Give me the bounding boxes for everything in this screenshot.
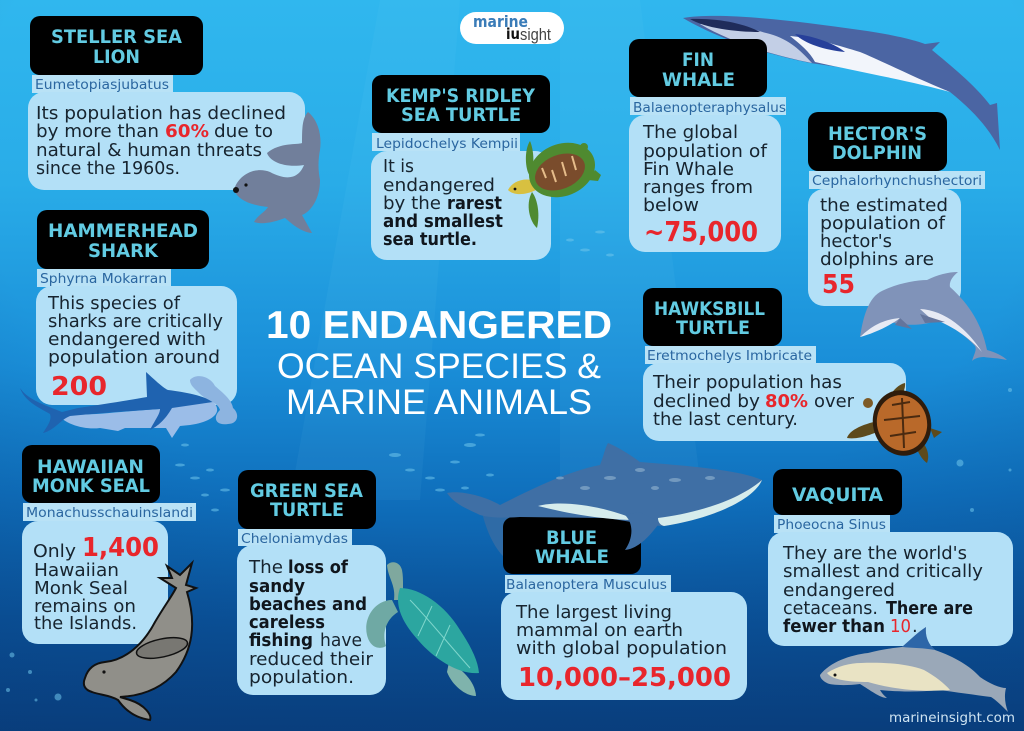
heading: blue whale xyxy=(503,517,641,574)
text block: dolphins are xyxy=(820,249,934,270)
heading: Hawaiian monk seal: MONK SEAL xyxy=(32,476,150,497)
credit: website: marineinsight.com xyxy=(889,711,1015,726)
text block: hector's xyxy=(820,231,892,252)
text block: Hawaiian xyxy=(34,560,119,581)
text block: the last century. xyxy=(653,409,798,430)
heading: hawksbill turtle: TURTLE xyxy=(676,318,750,339)
icon: hammerhead shark xyxy=(20,372,237,438)
text block: over xyxy=(814,391,855,412)
text block: 10,000–25,000 xyxy=(518,663,731,693)
heading: hawksbill turtle xyxy=(643,288,782,346)
text block: This species of xyxy=(47,293,181,314)
text block: with global population xyxy=(516,638,727,659)
scientific name: Cephalorhynchushectori xyxy=(812,174,982,189)
text block: endangered xyxy=(783,580,895,601)
heading: fin whale: FIN xyxy=(682,50,714,71)
text block: fishing xyxy=(249,630,313,651)
text block: since the 1960s. xyxy=(36,158,180,179)
scientific name: Balaenopteraphysalus xyxy=(633,101,786,116)
scientific name: Eumetopiasjubatus xyxy=(35,78,169,93)
text block: and smallest xyxy=(383,211,503,232)
text block: smallest and critically xyxy=(783,561,983,582)
icon: blue whale tail (behind label) xyxy=(482,506,530,562)
text block xyxy=(237,545,386,695)
text block: declined by xyxy=(653,391,760,412)
scientific name: Sphyrna Mokarran xyxy=(40,272,167,287)
text block: reduced their xyxy=(249,649,374,670)
heading: Hector's dolphin: DOLPHIN xyxy=(832,143,922,164)
heading: hammerhead shark: SHARK xyxy=(88,241,159,262)
text block xyxy=(768,532,1013,646)
text block: population around xyxy=(48,347,220,368)
text block: careless xyxy=(249,612,325,633)
text block xyxy=(22,521,168,644)
heading: hammerhead shark: HAMMERHEAD xyxy=(48,221,198,242)
icon: sea lion xyxy=(233,112,320,233)
text block: 1,400 xyxy=(82,533,159,563)
text block: ~75,000 xyxy=(644,215,758,248)
text block: 200 xyxy=(51,372,107,402)
panel: fin whale xyxy=(629,16,1000,252)
heading: vaquita xyxy=(773,469,902,515)
heading: green sea turtle xyxy=(238,470,376,529)
heading: Hector's dolphin xyxy=(808,112,947,171)
logo: marine insight xyxy=(460,12,564,44)
text block: loss of xyxy=(288,557,348,578)
panel: vaquita xyxy=(768,469,1013,712)
icon: dolphin xyxy=(860,272,1007,361)
text block: below xyxy=(643,195,699,216)
panel: green sea turtle xyxy=(237,470,479,696)
text block: population. xyxy=(249,667,354,688)
heading: fin whale: WHALE xyxy=(662,70,735,91)
heading: blue whale: BLUE xyxy=(546,528,597,549)
heading: Hector's dolphin: HECTOR'S xyxy=(828,124,927,145)
text block: 80% xyxy=(765,391,808,412)
scientific name: Cheloniamydas xyxy=(241,532,348,547)
icon: fin whale xyxy=(683,16,1000,150)
heading: Steller sea lion: STELLER SEA xyxy=(51,27,183,48)
heading: green sea turtle: GREEN SEA xyxy=(250,481,364,502)
panel: Kemp's ridley sea turtle xyxy=(371,75,603,260)
text block: sandy xyxy=(249,576,305,597)
text block: They are the world's xyxy=(782,543,967,564)
text block: ranges from xyxy=(643,177,753,198)
title: MARINE ANIMALS xyxy=(286,383,592,422)
text block: due to xyxy=(214,121,273,142)
icon: vaquita xyxy=(820,627,1008,712)
text block: the estimated xyxy=(820,195,948,216)
title xyxy=(266,304,612,422)
heading: hammerhead shark xyxy=(37,210,209,269)
heading: vaquita: VAQUITA xyxy=(792,485,884,506)
text block: endangered xyxy=(383,175,495,196)
text block: 55 xyxy=(822,270,855,300)
heading: fin whale xyxy=(629,39,767,97)
logo: marine insight: marine xyxy=(473,12,528,31)
logo: marine insight: sight xyxy=(520,25,551,44)
panel: Hawaiian monk seal xyxy=(22,445,196,720)
text block: population of xyxy=(820,213,946,234)
text block xyxy=(371,151,551,260)
text block: The xyxy=(248,557,283,578)
text block xyxy=(36,286,237,405)
panel: Steller sea lion xyxy=(28,16,320,233)
heading: Kemp's ridley sea turtle: KEMP'S RIDLEY xyxy=(386,86,536,107)
panel: Hector's dolphin xyxy=(808,112,1007,361)
scientific name: Lepidochelys Kempii xyxy=(376,137,518,152)
text block: fewer than xyxy=(783,616,885,637)
text block: by the xyxy=(383,193,441,214)
text block: Only xyxy=(33,541,76,562)
heading: Steller sea lion xyxy=(30,16,203,75)
text block: population of xyxy=(643,141,768,162)
text block xyxy=(28,92,305,190)
text block: It is xyxy=(383,156,414,177)
scientific name: Monachusschauinslandi xyxy=(26,506,193,521)
text block xyxy=(501,592,747,700)
text block: There are xyxy=(886,598,973,619)
text block: cetaceans. xyxy=(783,598,878,619)
text block: Monk Seal xyxy=(34,578,128,599)
icon: monk seal xyxy=(84,563,196,720)
heading: Kemp's ridley sea turtle: SEA TURTLE xyxy=(401,105,521,126)
text block: Its population has declined xyxy=(36,103,286,124)
text block: . xyxy=(912,616,918,637)
logo: marine insight: iu xyxy=(506,25,520,43)
scientific name: Balaenoptera Musculus xyxy=(506,578,667,593)
text block xyxy=(808,189,961,306)
icon: hawksbill turtle xyxy=(847,383,942,463)
heading: blue whale: WHALE xyxy=(535,547,609,568)
text block: have xyxy=(320,630,362,651)
text block: by more than xyxy=(36,121,159,142)
heading: Hawaiian monk seal xyxy=(22,445,160,503)
panel: blue whale xyxy=(447,443,762,700)
text block: The largest living xyxy=(515,602,672,623)
title: 10 ENDANGERED xyxy=(266,304,612,347)
text block: rarest xyxy=(447,193,502,214)
text block: sea turtle. xyxy=(383,229,477,250)
icon: Kemp's ridley turtle xyxy=(508,133,603,228)
text block: remains on xyxy=(34,596,136,617)
text block xyxy=(629,115,781,252)
heading: Kemp's ridley sea turtle xyxy=(372,75,550,133)
title: OCEAN SPECIES & xyxy=(277,347,601,386)
text block: mammal on earth xyxy=(516,620,683,641)
text block: 10 xyxy=(890,616,911,637)
icon: green sea turtle xyxy=(366,562,479,696)
text block: The global xyxy=(642,122,738,143)
heading: hawksbill turtle: HAWKSBILL xyxy=(654,299,765,320)
heading: Hawaiian monk seal: HAWAIIAN xyxy=(37,457,144,478)
icon: blue whale xyxy=(447,443,762,550)
panel: hawksbill turtle xyxy=(643,288,942,463)
heading: green sea turtle: TURTLE xyxy=(270,500,344,521)
text block: sharks are critically xyxy=(48,311,223,332)
text block: Their population has xyxy=(652,372,842,393)
text block: Fin Whale xyxy=(643,159,734,180)
text block: endangered with xyxy=(48,329,206,350)
text block: 60% xyxy=(165,121,209,142)
scientific name: Phoeocna Sinus xyxy=(777,518,886,533)
text block: the Islands. xyxy=(34,613,137,634)
text block xyxy=(643,363,906,441)
text block: beaches and xyxy=(249,594,367,615)
text block: natural & human threats xyxy=(36,140,262,161)
heading: Steller sea lion: LION xyxy=(93,47,140,68)
panel: hammerhead shark xyxy=(20,210,237,438)
scientific name: Eretmochelys Imbricate xyxy=(647,349,812,364)
